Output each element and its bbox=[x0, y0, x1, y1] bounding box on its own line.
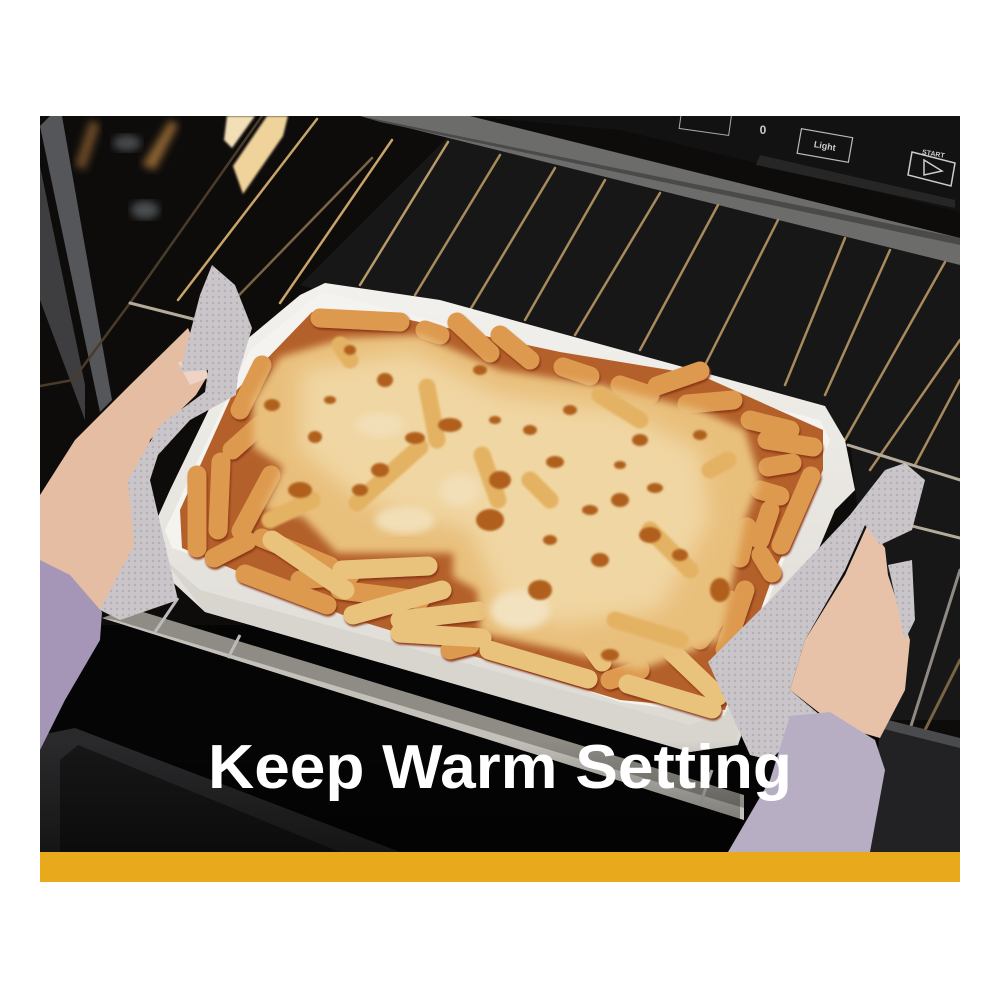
right hand bbox=[790, 524, 910, 738]
left sleeve bbox=[40, 560, 102, 750]
control panel: Light bbox=[813, 139, 837, 153]
oven rack bbox=[40, 116, 960, 730]
left hand bbox=[40, 328, 208, 610]
pasta bake bbox=[180, 312, 823, 710]
control panel: 0 bbox=[760, 123, 767, 137]
control panel: START bbox=[921, 149, 946, 160]
panel: oven photo bbox=[40, 109, 960, 852]
right towel bbox=[708, 463, 925, 760]
pasta tubes bbox=[197, 318, 813, 709]
melted cheese bbox=[253, 335, 760, 670]
bottom accent bar bbox=[40, 852, 960, 882]
oven light glow bbox=[75, 116, 288, 219]
title: Keep Warm Setting bbox=[208, 733, 792, 802]
lower rack and door bbox=[40, 598, 960, 852]
cheesy pasta tubes bbox=[270, 345, 728, 640]
bottom dark gradient bbox=[40, 740, 740, 852]
right sleeve bbox=[728, 712, 885, 852]
baking dish bbox=[152, 283, 855, 752]
oven interior bbox=[40, 116, 960, 738]
left towel bbox=[100, 265, 252, 620]
control panel bbox=[360, 109, 960, 265]
browned cheese spots bbox=[264, 345, 730, 661]
